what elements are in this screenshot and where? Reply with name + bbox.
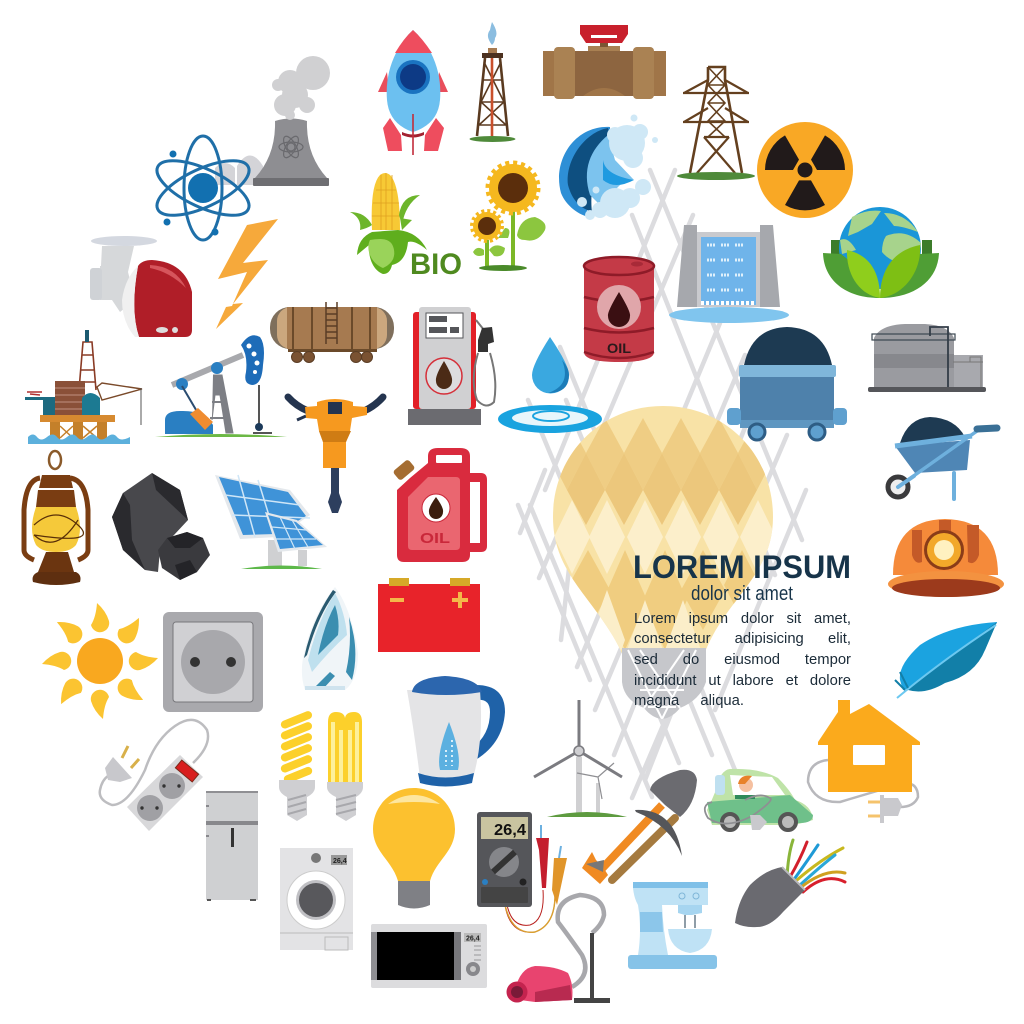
icon: stand mixer — [628, 882, 717, 969]
icon: tank wagon — [270, 302, 394, 362]
icon: storage tanks — [868, 324, 986, 392]
bulb base — [622, 648, 706, 719]
icon: power pylon — [677, 67, 755, 180]
icon: earth with leaves — [823, 207, 939, 298]
icon: nuclear plant domes — [215, 156, 263, 185]
icon: oil canister — [392, 448, 487, 562]
icon: wall socket — [163, 612, 263, 712]
label: multimeter reading: 26,4 — [494, 822, 526, 839]
icon: radiation sign — [757, 122, 853, 218]
icon: sunflowers — [472, 163, 546, 271]
icon: wheelbarrow — [888, 417, 997, 499]
paragraph: Lorem ipsum dolor sit amet, — [634, 610, 851, 626]
icon: electric kettle — [407, 676, 505, 786]
icon: meat grinder — [90, 236, 192, 337]
icon: atom — [150, 136, 256, 240]
title block — [633, 549, 851, 714]
icon: oil platform — [25, 330, 142, 444]
icon: jackhammer — [288, 397, 383, 513]
subheading: dolor sit amet — [691, 583, 793, 605]
paragraph: consectetur adipisicing elit, — [634, 631, 851, 647]
icon: sun — [42, 603, 158, 719]
icon: microwave — [371, 924, 487, 988]
icon: oil derrick — [470, 22, 516, 142]
paragraph — [634, 608, 851, 714]
paragraph: magna aliqua. — [634, 693, 744, 709]
paragraph: incididunt ut labore et dolore — [634, 673, 851, 689]
icon: lightning bolt — [216, 219, 278, 329]
icon: oil lantern — [24, 451, 88, 585]
icon: water drop and puddle — [498, 337, 602, 433]
icon: light bulb small — [373, 788, 455, 908]
icon: dam — [669, 225, 789, 323]
icon: solar panel — [215, 475, 327, 569]
icon: fridge — [206, 791, 258, 901]
icon: electric car — [705, 769, 813, 830]
icon: oil barrel — [584, 257, 654, 362]
icon: CFL lamps — [279, 710, 363, 821]
icon: rocket — [378, 30, 448, 155]
icon: iron — [302, 587, 358, 690]
paragraph: sed do eiusmod tempor — [634, 652, 851, 668]
heading: LOREM IPSUM — [633, 549, 851, 585]
icon: washing machine — [280, 848, 353, 950]
light bulb illustration — [548, 406, 776, 719]
icon: water wave — [559, 114, 658, 220]
icon: oil canister: OIL — [420, 530, 450, 547]
icon: miner helmet — [888, 519, 1004, 597]
label: microwave display: 26,4 — [466, 936, 480, 942]
label: washer display: 26,4 — [333, 858, 347, 865]
icon: house with plug — [808, 700, 920, 823]
icon: battery — [378, 578, 480, 652]
icon: oil barrel: OIL — [607, 341, 631, 356]
icon: wind turbines — [534, 700, 627, 817]
icon: coal lumps — [112, 473, 210, 580]
label: BIO: BIO — [410, 248, 462, 281]
icon: coal cart — [727, 327, 847, 440]
lattice background — [518, 170, 806, 798]
icon: pipe valve — [543, 25, 666, 99]
icon: fuel pump — [408, 307, 495, 425]
icon: multimeter — [477, 812, 567, 932]
icon: cooling tower with smoke — [253, 56, 330, 186]
icon: feather — [895, 622, 997, 698]
icon: corn — [350, 173, 462, 281]
icon: pickaxe and shovel — [582, 770, 697, 884]
icon: power strip — [100, 720, 208, 831]
icon: cable — [735, 840, 845, 927]
icon: oil pump jack — [155, 335, 287, 437]
icon: vacuum cleaner — [506, 895, 610, 1003]
